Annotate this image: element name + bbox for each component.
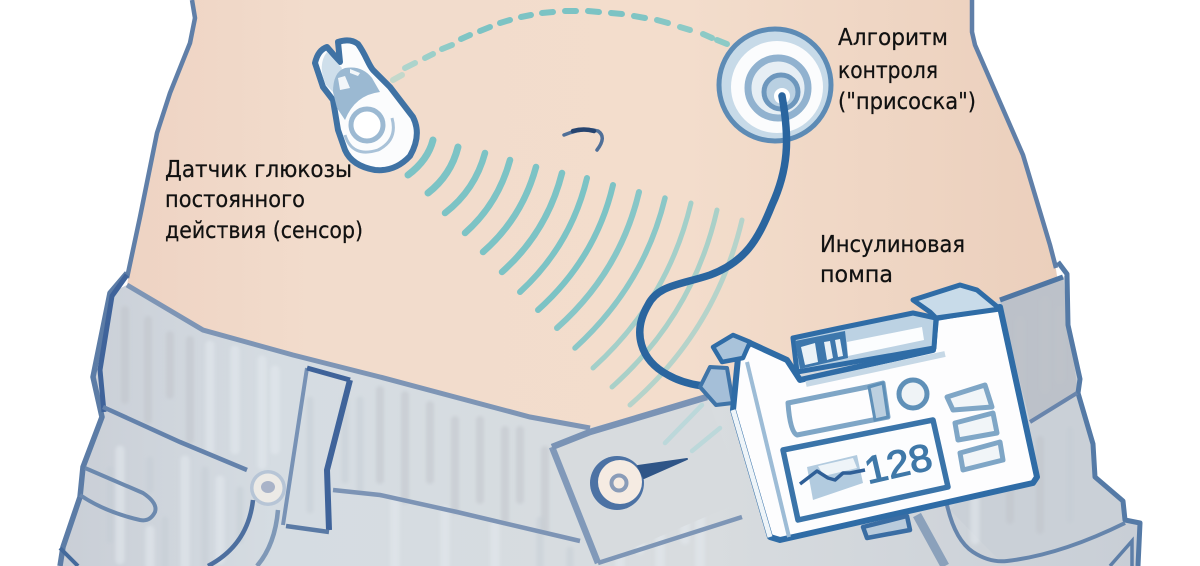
dashed wireless link: sensor to control algorithm — [393, 11, 727, 80]
label: sensor: Датчик глюкозы — [165, 157, 352, 183]
label: control algorithm: Алгоритм — [838, 25, 948, 51]
jeans: waist top seam — [127, 285, 590, 428]
jeans: waistband lower seam middle — [333, 490, 580, 541]
label: insulin pump: Инсулиновая — [820, 232, 965, 258]
pump: side connector — [700, 367, 733, 405]
pump: corner cap — [713, 335, 750, 362]
pump: glucose reading: 128 — [861, 437, 936, 493]
jeans: base shape — [60, 274, 1140, 566]
jeans: belt loop — [283, 368, 350, 532]
pump: syringe compartment — [793, 313, 936, 372]
jeans: right outer edge — [1058, 262, 1140, 566]
infusion tube — [640, 96, 787, 387]
signal arcs: sensor to pump — [408, 140, 742, 405]
jeans: button flap — [552, 397, 745, 563]
jeans: waist right seam — [1000, 277, 1063, 300]
jeans: side pocket tab — [80, 468, 156, 520]
jeans: rivet button — [250, 470, 286, 506]
navel — [564, 130, 602, 150]
pump: syringe barrel — [847, 327, 924, 356]
jeans: right pocket curve — [947, 505, 1125, 561]
outline: torso left — [127, 0, 195, 278]
jeans: waistband lower seam right — [1030, 393, 1077, 422]
jeans: waistband lower seam left — [103, 407, 247, 470]
label: control algorithm: контроля — [838, 58, 938, 84]
control algorithm patch — [719, 29, 831, 141]
pump: status slot — [788, 383, 888, 435]
pump: belt clip — [863, 516, 910, 538]
insulin pump — [700, 285, 1037, 540]
jeans: front pocket curves — [208, 500, 278, 566]
pump: top cap — [913, 285, 1000, 318]
label: control algorithm: ("присоска") — [838, 89, 976, 115]
pump: display screen — [783, 420, 948, 520]
flap button — [590, 456, 687, 510]
jeans: left outer edge — [60, 273, 127, 566]
label: insulin pump: помпа — [820, 262, 893, 288]
skin: torso — [127, 0, 1060, 450]
jeans: waistband right shading — [1000, 277, 1078, 422]
pump: body — [733, 307, 1037, 540]
label: sensor: постоянного — [165, 187, 305, 213]
label: sensor: действия (сенсор) — [165, 218, 363, 244]
pump: plunger knob — [795, 331, 848, 369]
sensor: glucose sensor — [315, 40, 417, 170]
jeans — [60, 262, 1140, 566]
jeans: denim streaks — [116, 319, 979, 566]
pump: round knob — [899, 380, 927, 408]
pump: left side strip — [747, 362, 789, 537]
pump: side buttons — [947, 385, 1003, 470]
outline: torso right — [972, 0, 1056, 268]
